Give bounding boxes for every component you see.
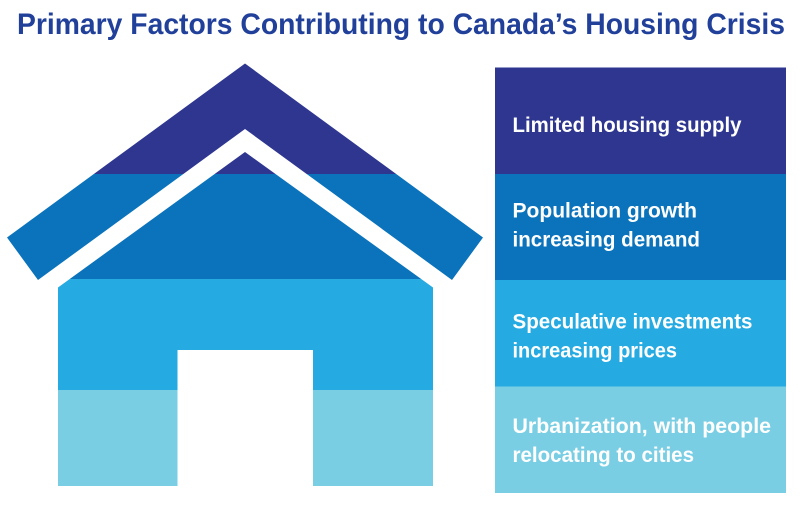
house body bbox=[50, 150, 440, 486]
panel: urbanization: relocating to cities bbox=[512, 444, 694, 467]
panel: urbanization bbox=[495, 386, 786, 493]
house roof bbox=[0, 60, 490, 284]
icon: house bbox=[0, 60, 490, 486]
panel: limited housing supply bbox=[495, 68, 786, 174]
panel: speculative investments: increasing prices bbox=[512, 340, 677, 362]
title: Primary Factors Contributing to Canada’s Housing Crisis bbox=[17, 8, 785, 41]
panel: population growth bbox=[495, 174, 786, 280]
panel: urbanization: Urbanization, with people bbox=[512, 415, 771, 438]
panel: limited housing supply: Limited housing supply bbox=[512, 114, 742, 137]
panel: population growth: Population growth bbox=[512, 200, 697, 222]
panel: speculative investments bbox=[495, 280, 786, 386]
panel: population growth: increasing demand bbox=[512, 228, 700, 252]
panel: speculative investments: Speculative investments bbox=[512, 310, 752, 334]
